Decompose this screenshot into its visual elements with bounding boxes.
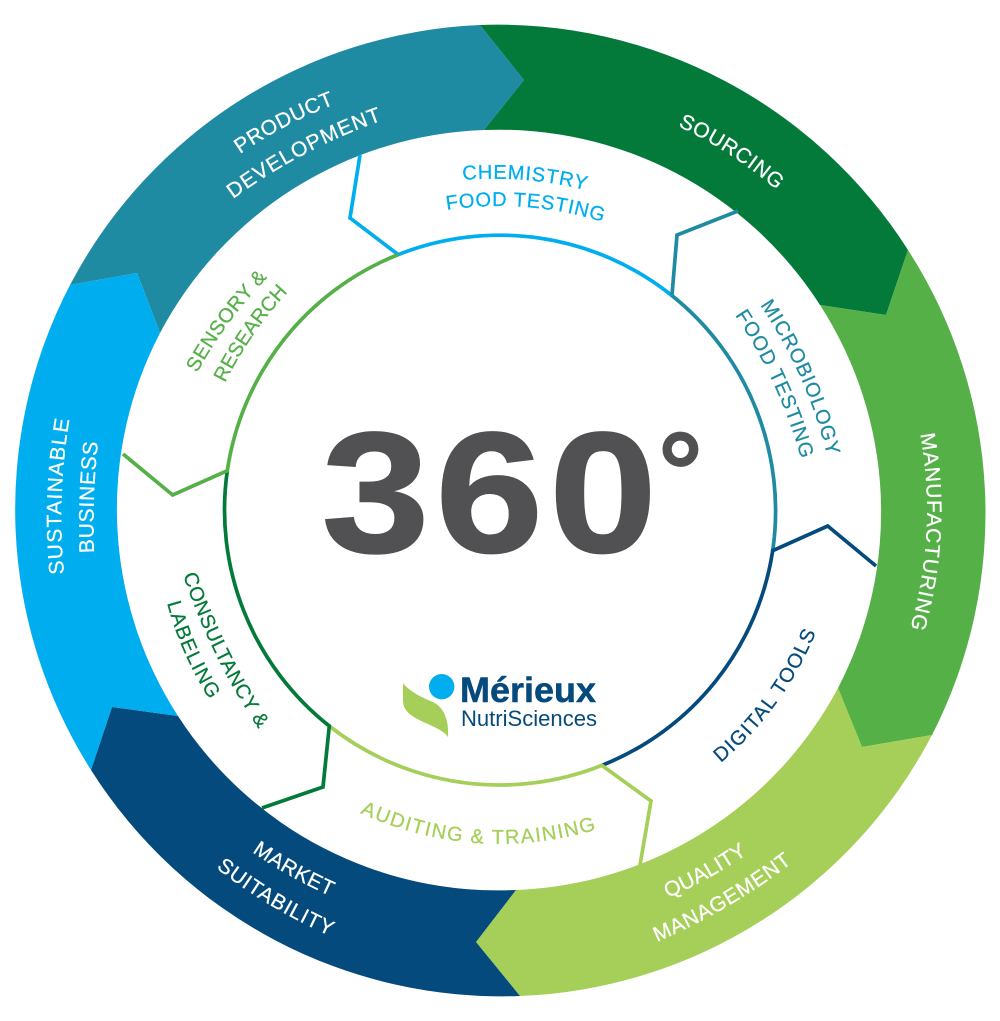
icon: green leaf [403,683,448,737]
outer ring segment: Manufacturing [820,250,986,747]
inner segment: Sensory and Research: RESEARCH [213,284,287,382]
inner segment: Consultancy and Labeling: LABELING [167,600,219,698]
inner segment: Auditing and Training [330,724,653,865]
outer ring segment: Manufacturing: MANUFACTURING [912,433,942,630]
inner segment: Microbiology Food Testing: MICROBIOLOGY [760,298,841,452]
inner segment: Auditing and Training: AUDITING & TRAINING [360,802,594,844]
outer ring segment: Market Suitability: SUITABILITY [218,858,336,934]
outer ring segment: Market Suitability: MARKET [253,840,336,894]
inner segment: Consultancy and Labeling [167,471,332,810]
inner segment: Sensory and Research [122,252,399,498]
central heading: 360 degrees: 360 [322,396,663,589]
inner segment: Microbiology Food Testing [670,209,841,550]
central heading: 360 degrees: ° [658,409,703,534]
inner segment: Digital Tools [601,524,878,766]
outer ring segment: Market Suitability [91,707,520,996]
outer ring segment: Quality Management: MANAGEMENT [652,852,788,942]
logo wordmark: NutriSciences: NutriSciences [461,706,597,731]
outer ring segment: Sourcing: SOURCING [680,115,783,188]
outer ring segment: Sourcing [480,24,908,315]
inner segment: Digital Tools: DIGITAL TOOLS [712,629,814,762]
logo: Mérieux NutriSciences [403,671,597,737]
outer ring segment: Product Development: DEVELOPMENT [226,106,378,198]
inner segment: Chemistry Food Testing: FOOD TESTING [446,192,604,220]
inner segment: Chemistry Food Testing [348,154,672,296]
outer ring segment: Product Development [70,25,524,333]
outer ring segment: Product Development: PRODUCT [233,91,330,154]
outer ring segment: Quality Management: QUALITY [664,842,743,898]
outer ring segment: Sustainable Business [15,273,178,770]
inner segment: Microbiology Food Testing: FOOD TESTING [736,308,813,457]
outer ring segment: Quality Management [476,688,932,996]
logo wordmark: Mérieux: Mérieux [460,671,597,710]
inner segment: Sensory and Research: SENSORY & [187,272,268,371]
icon: blue dot [429,674,454,699]
outer ring segment: Sustainable Business: BUSINESS [78,442,98,552]
inner segment: Consultancy and Labeling: CONSULTANCY & [184,573,268,729]
inner segment: Chemistry Food Testing: CHEMISTRY [463,164,589,189]
outer ring segment: Sustainable Business: SUSTAINABLE [46,418,70,574]
